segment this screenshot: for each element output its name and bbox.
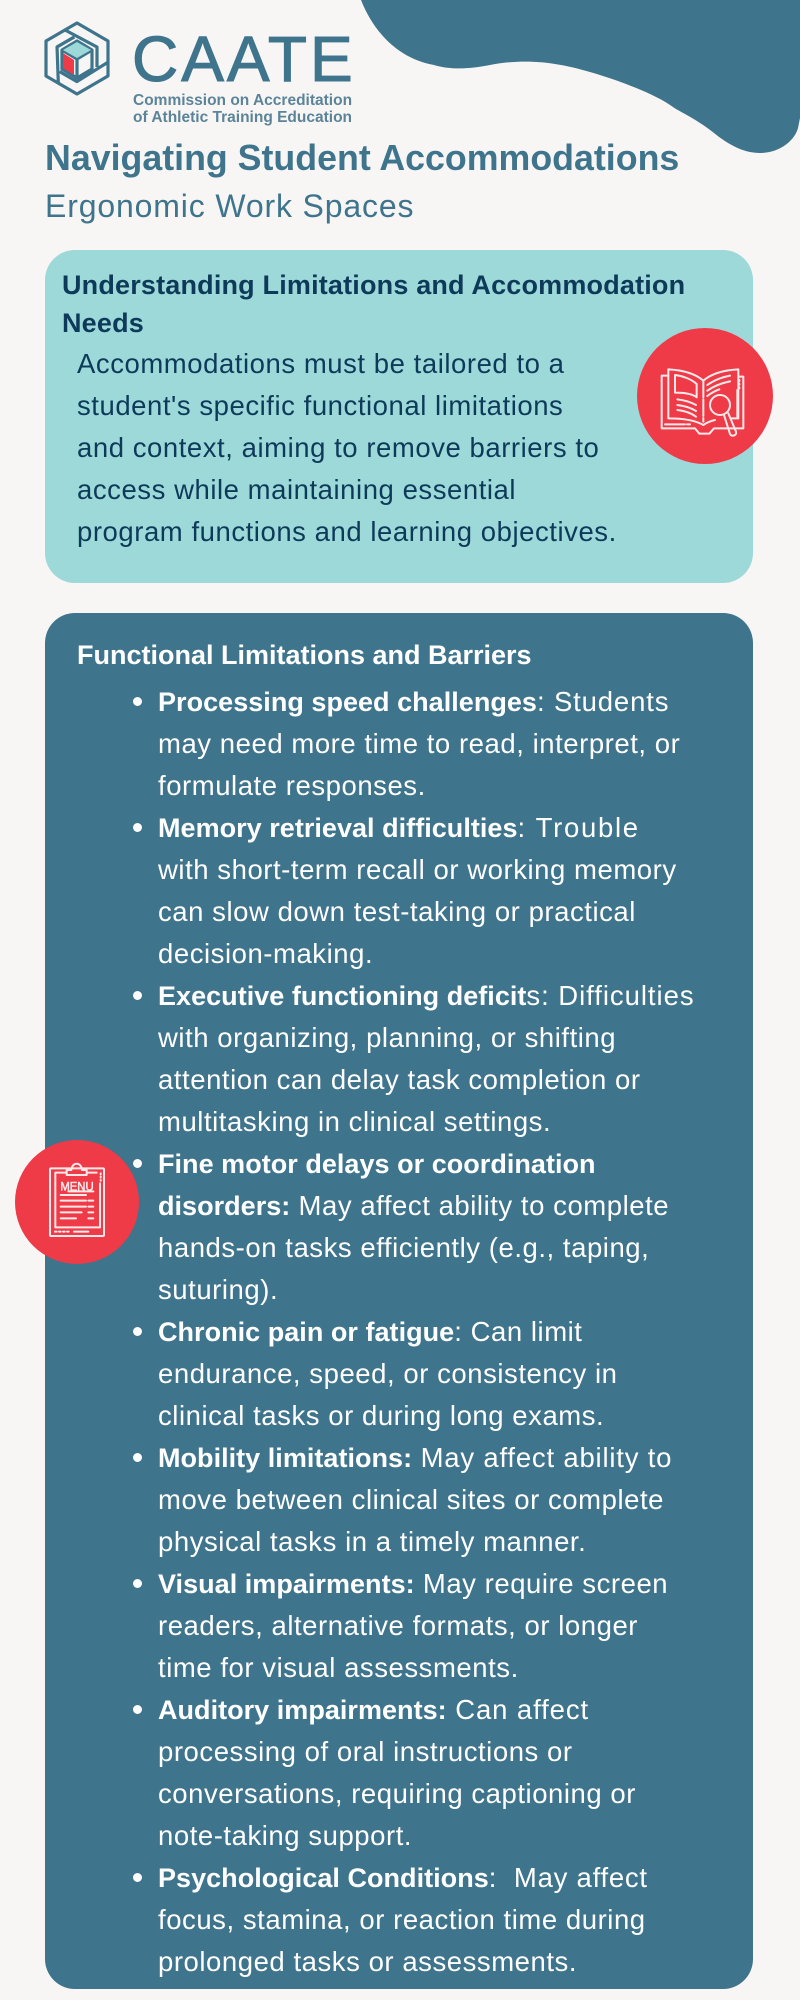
icon: hexagon logo mark — [44, 21, 110, 96]
logo tagline: of Athletic Training Education — [133, 109, 352, 126]
list item: visual: readers, alternative formats, or longer — [158, 1610, 638, 1641]
list item: chronic pain — [158, 1311, 695, 1437]
list item: executive functioning: multitasking in clinical settings. — [158, 1106, 551, 1137]
panel body text — [77, 348, 617, 547]
list item: visual — [158, 1563, 695, 1689]
list item: auditory: Auditory impairments: Can affect — [158, 1694, 589, 1725]
list item: auditory: note-taking support. — [158, 1820, 412, 1851]
list item: auditory — [158, 1689, 695, 1857]
panel body text: and context, aiming to remove barriers to — [77, 432, 599, 463]
panel body text: Accommodations must be tailored to a — [77, 348, 565, 379]
list item: visual: time for visual assessments. — [158, 1652, 519, 1683]
icon: menu clipboard — [15, 1140, 139, 1264]
list item: memory retrieval: decision-making. — [158, 938, 373, 969]
logo: CAATE — [44, 21, 356, 126]
list item: visual: Visual impairments: May require screen — [158, 1568, 668, 1599]
list item: processing speed — [158, 681, 695, 807]
list item: processing speed: may need more time to read, interpret, or — [158, 728, 680, 759]
panel heading: Functional Limitations and Barriers — [77, 640, 532, 670]
panel heading: Understanding Limitations and Accommodation — [62, 270, 685, 300]
logo wordmark: CAATE — [132, 23, 356, 95]
list item: memory retrieval — [158, 807, 695, 975]
list item: fine motor: disorders: May affect ability to complete — [158, 1190, 669, 1221]
panel heading — [62, 270, 685, 338]
barrier list — [133, 686, 695, 1977]
panel body text: access while maintaining essential — [77, 474, 516, 505]
list item: memory retrieval: Memory retrieval difficulties: Trouble — [158, 812, 640, 843]
list item: chronic pain: clinical tasks or during long exams. — [158, 1400, 604, 1431]
list item: chronic pain: endurance, speed, or consistency in — [158, 1358, 618, 1389]
list item: executive functioning: with organizing, planning, or shifting — [158, 1022, 616, 1053]
list item: psychological: Psychological Conditions: May affect — [158, 1862, 648, 1893]
list item: processing speed: Processing speed challenges: Students — [158, 686, 669, 717]
panel heading: Needs — [62, 308, 144, 338]
list item: mobility: Mobility limitations: May affect ability to — [158, 1442, 672, 1473]
panel body text: student's specific functional limitations — [77, 390, 563, 421]
list item: fine motor: suturing). — [158, 1274, 278, 1305]
logo tagline: Commission on Accreditation — [133, 92, 352, 109]
list item: fine motor: Fine motor delays or coordination — [158, 1149, 596, 1179]
title: Navigating Student Accommodations — [45, 138, 679, 178]
panel body text: program functions and learning objectives. — [77, 516, 617, 547]
list item: memory retrieval: with short-term recall or working memory — [158, 854, 677, 885]
list item: psychological: prolonged tasks or assessments. — [158, 1946, 577, 1977]
list item: chronic pain: Chronic pain or fatigue: Can limit — [158, 1316, 582, 1347]
icon: menu clipboard: MENU — [60, 1179, 94, 1193]
list item: auditory: conversations, requiring captioning or — [158, 1778, 636, 1809]
list item: fine motor: hands-on tasks efficiently (e.g., taping, — [158, 1232, 649, 1263]
list item: processing speed: formulate responses. — [158, 770, 426, 801]
list item: memory retrieval: can slow down test-taking or practical — [158, 896, 636, 927]
list item: auditory: processing of oral instructions or — [158, 1736, 573, 1767]
list item: mobility: move between clinical sites or complete — [158, 1484, 664, 1515]
logo tagline — [133, 92, 352, 126]
panel: functional limitations and barriers — [45, 613, 753, 1989]
list item: psychological — [158, 1857, 695, 1983]
list item: mobility — [158, 1437, 695, 1563]
list item: executive functioning: Executive functioning deficits: Difficulties — [158, 980, 695, 1011]
list item: psychological: focus, stamina, or reaction time during — [158, 1904, 646, 1935]
list item: fine motor — [158, 1143, 695, 1311]
panel: understanding limitations — [45, 250, 753, 583]
icon: open book with magnifier — [637, 328, 773, 464]
list item: executive functioning: attention can delay task completion or — [158, 1064, 641, 1095]
decorative blob: top right — [361, 0, 800, 153]
list item: mobility: physical tasks in a timely manner. — [158, 1526, 586, 1557]
subtitle: Ergonomic Work Spaces — [45, 188, 414, 224]
list item: executive functioning — [158, 975, 695, 1143]
